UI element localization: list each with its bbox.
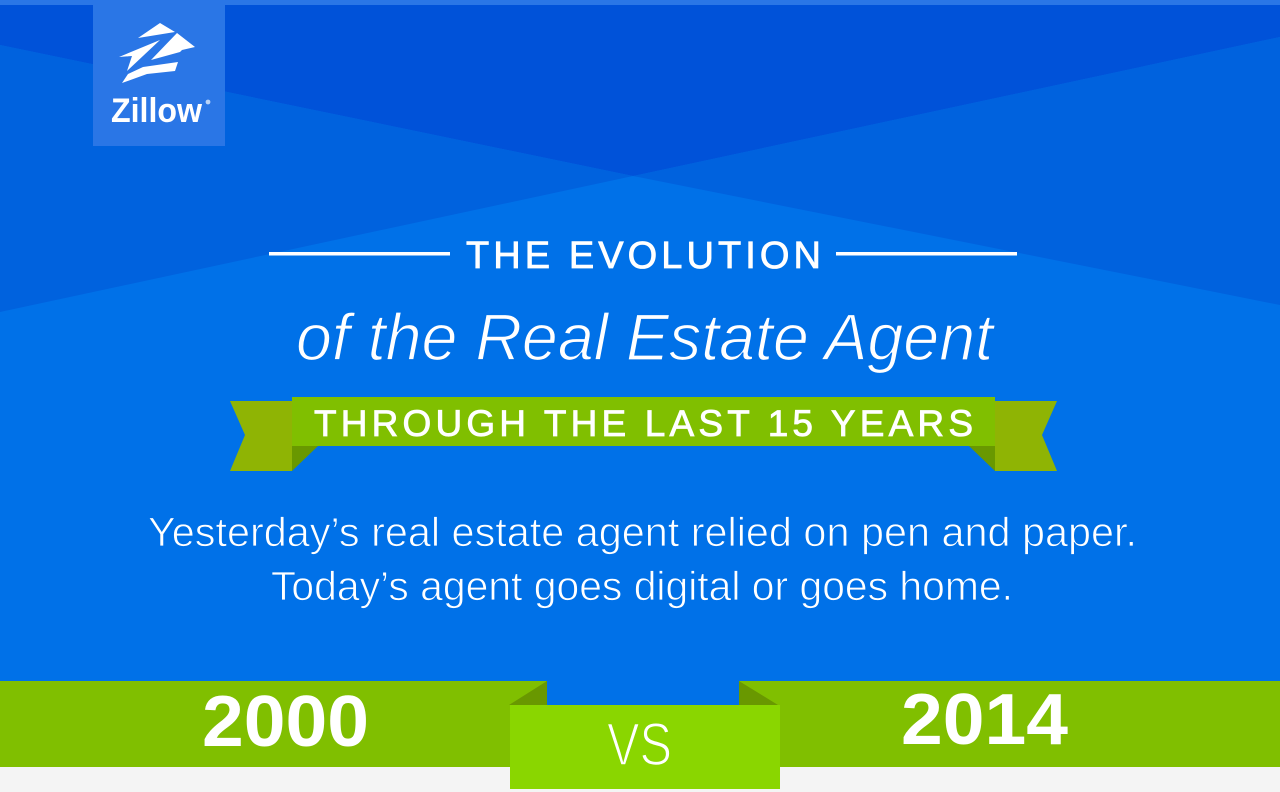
registered mark <box>206 100 210 104</box>
left band 2000 <box>0 681 547 767</box>
description text: Today’s agent goes digital or goes home. <box>271 563 1013 609</box>
VS tab <box>510 705 780 789</box>
comparison banner <box>0 680 1280 789</box>
ribbon main band <box>292 397 995 446</box>
ribbon folds <box>292 446 318 471</box>
VS label: VS <box>607 711 672 778</box>
description text <box>148 509 1137 609</box>
ribbon left tail <box>230 401 292 471</box>
right band 2014 <box>739 681 1280 767</box>
subtitle: of the Real Estate Agent: of the Real Estate Agent <box>296 300 996 374</box>
icon: Zillow house mark <box>119 23 195 83</box>
ribbon text: THROUGH THE LAST 15 YEARS <box>314 403 973 444</box>
title: The Evolution: THE EVOLUTION <box>466 235 821 277</box>
ribbon right tail <box>995 401 1057 471</box>
title: The Evolution <box>269 235 1017 277</box>
year 2014: 2014 <box>901 680 1068 760</box>
banner folds <box>509 681 547 705</box>
year 2000: 2000 <box>202 682 369 762</box>
ribbon banner <box>230 397 1057 471</box>
wordmark: Zillow <box>111 92 203 130</box>
description text: Yesterday’s real estate agent relied on pen and paper. <box>148 509 1137 555</box>
logo: Zillow <box>93 0 225 146</box>
